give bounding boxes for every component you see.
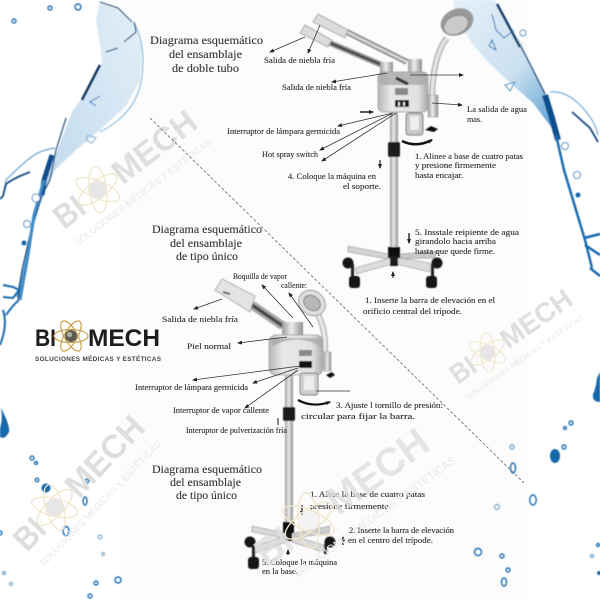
title: tipo único: Diagrama esquemático — [152, 222, 262, 236]
pole and base — [244, 375, 336, 569]
labels: doble tubo: Salida de niebla fría — [264, 56, 335, 65]
device: single type steamer — [215, 279, 336, 569]
labels: ensamblaje inferior: en el centro del trípode. — [348, 536, 433, 545]
dashed divider — [150, 118, 524, 483]
water splash right — [453, 0, 600, 276]
labels: doble tubo: 1. Inserte la barra de elevación en el — [365, 296, 496, 305]
labels: doble tubo: orificio central del trípode. — [363, 307, 462, 316]
labels: doble tubo: hasta que quede firme. — [415, 247, 495, 256]
pole and base — [342, 112, 442, 288]
labels: doble tubo: Salida de niebla fría — [282, 83, 351, 92]
labels: tipo único — [135, 272, 443, 435]
logo: Biomech: SOLUCIONES MÉDICAS Y ESTÉTICAS — [35, 354, 162, 363]
title: tipo único inferior: de tipo único — [176, 488, 237, 502]
upper mist arm — [313, 14, 407, 62]
watermark: bottom left — [1, 404, 164, 569]
icon: rotation arrow top — [402, 140, 432, 144]
labels: doble tubo: La salida de agua — [467, 105, 527, 114]
leader lines: double tube — [270, 25, 463, 278]
logo: Biomech: BI — [35, 325, 56, 352]
labels: doble tubo: hasta encajar. — [415, 171, 463, 180]
labels: doble tubo: 5. Insstale reipiente de agua — [415, 228, 520, 237]
labels: tipo único: circular para fijar la barra. — [301, 412, 415, 421]
arrow: insert marker — [360, 111, 373, 113]
watermark: top left: SOLUCIONES MÉDICAS Y ESTÉTICAS — [73, 137, 213, 248]
labels: tipo único: Interruptor de vapor callente — [173, 406, 269, 415]
title: tipo único inferior: Diagrama esquemático — [152, 462, 262, 476]
icon: atom — [54, 318, 88, 354]
labels: doble tubo: 4. Coloque la máquina en — [288, 172, 376, 181]
labels: doble tubo: el soporte. — [343, 182, 381, 191]
logo: Biomech: MECH — [88, 325, 160, 352]
lamp and hose — [294, 285, 331, 371]
watermark: bottom center: MECH — [318, 420, 437, 523]
labels: doble tubo: girandolo hacia arriba — [415, 237, 497, 246]
watermark: right: MECH — [494, 283, 578, 355]
watermark: bottom left: SOLUCIONES MÉDICAS Y ESTÉTICAS — [37, 439, 163, 569]
main body — [378, 59, 438, 135]
lamp and hose — [428, 3, 478, 117]
watermark: bottom center: BI — [246, 519, 301, 575]
labels: tipo único: Interuptor de pulverización fría — [186, 426, 287, 435]
watermark: bottom center — [242, 406, 458, 591]
labels: tipo único: Boquilla de vapor — [233, 272, 287, 281]
title: doble tubo — [150, 33, 263, 75]
labels: tipo único: Piel normal — [187, 342, 232, 351]
labels: tipo único: Salida de niebla fría — [162, 315, 239, 324]
labels: ensamblaje inferior: 5. Coloque la máquina — [262, 558, 337, 567]
labels: ensamblaje inferior: 2. Inserte la barra de elevación — [349, 526, 454, 535]
title: tipo único inferior: del ensamblaje — [170, 475, 241, 489]
watermark: bottom center: SOLUCIONES MÉDICAS Y ESTÉTICAS — [291, 454, 458, 580]
title: doble tubo: de doble tubo — [172, 61, 239, 75]
watermark: right: BI — [444, 350, 482, 390]
title: doble tubo: Diagrama esquemático — [150, 33, 263, 47]
watermark: top left — [42, 98, 214, 249]
watermark: top left: MECH — [104, 102, 204, 191]
labels: doble tubo: 1. Alinee a base de cuatro patas — [415, 152, 523, 161]
background panel — [120, 0, 528, 600]
watermark: top left: BI — [46, 188, 92, 236]
watermark: right: SOLUCIONES MÉDICAS Y ESTÉTICAS — [465, 313, 585, 401]
main body — [269, 322, 335, 395]
title: tipo único inferior — [152, 462, 262, 502]
labels: doble tubo: Hot spray switch — [262, 150, 318, 159]
icon: rotation arrow middle — [298, 400, 330, 405]
labels: tipo único: Interruptor de lámpara germicida — [135, 383, 248, 392]
labels: ensamblaje inferior: en la base. — [262, 567, 298, 576]
labels: doble tubo: y presione firmemente — [415, 161, 496, 170]
labels: doble tubo: mas. — [467, 115, 482, 124]
labels: doble tubo — [227, 56, 527, 316]
logo: Biomech — [35, 318, 162, 363]
labels: ensamblaje inferior: presione firmemente. — [310, 502, 391, 511]
labels: doble tubo: Interruptor de lámpara germicida — [227, 127, 340, 136]
labels: ensamblaje inferior — [262, 490, 454, 576]
watermark: right — [441, 278, 586, 401]
labels: tipo único: 3. Ajuste l tornillo de presión: — [336, 401, 443, 410]
labels: tipo único: callente: — [281, 281, 307, 290]
lower mist arm — [300, 25, 382, 65]
water splash left — [0, 1, 143, 438]
title: tipo único: del ensamblaje — [170, 236, 242, 250]
watermark: bottom left: BI — [6, 511, 54, 559]
labels: ensamblaje inferior: 1. Aline la base de cuatro patas — [310, 490, 425, 499]
title: tipo único: de tipo único — [176, 249, 238, 263]
mist arm — [215, 279, 283, 326]
leader lines: single type — [193, 285, 350, 555]
device: double tube steamer — [300, 3, 478, 288]
title: doble tubo: del ensamblaje — [169, 47, 242, 61]
watermark: bottom left: MECH — [58, 409, 153, 505]
title: tipo único — [152, 222, 262, 263]
